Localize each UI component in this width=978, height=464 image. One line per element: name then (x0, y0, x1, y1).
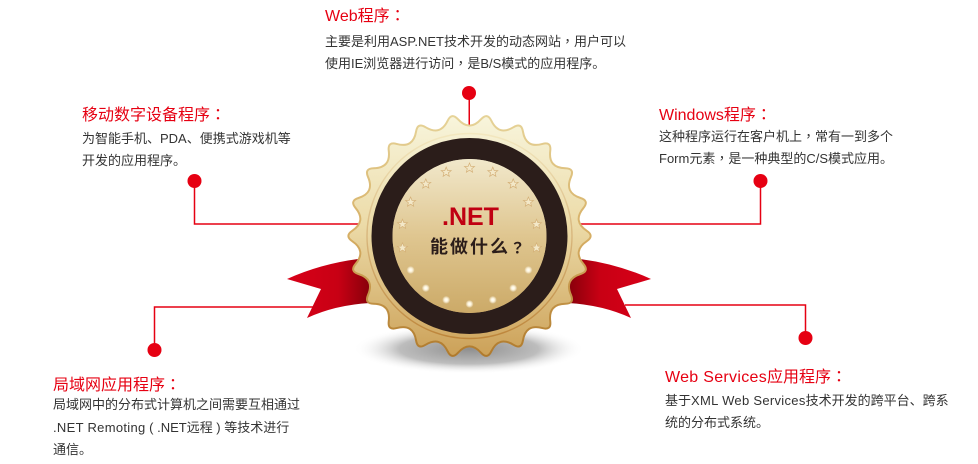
connector: lower left (148, 307, 320, 357)
medal shadow (353, 324, 585, 374)
body: Web Services: 统的分布式系统。 (665, 415, 769, 430)
inner disc (392, 159, 546, 313)
body: LAN: 局域网中的分布式计算机之间需要互相通过 (53, 397, 300, 412)
connector: right (580, 174, 768, 224)
body: Web Services: 基于XML Web Services技术开发的跨平台、跨系 (665, 393, 949, 408)
text block: Web (325, 2, 626, 72)
dark ring (382, 148, 557, 324)
heading: mobile: 移动数字设备程序： (82, 101, 226, 125)
body: Windows: 这种程序运行在客户机上，常有一到多个 (659, 126, 893, 145)
text block: LAN (53, 371, 300, 457)
medal subtitle: 能做什么？ (430, 237, 527, 258)
heading: Web Services: Web Services应用程序： (665, 363, 847, 387)
text block: mobile (82, 101, 291, 168)
medal badge (348, 116, 591, 356)
body: mobile (82, 131, 291, 168)
connector: lower right (625, 305, 812, 345)
heading: Web: Web程序： (325, 2, 406, 26)
text block: Web Services (665, 363, 949, 430)
text block: Windows (659, 101, 893, 167)
body: LAN (53, 397, 300, 457)
ribbon: right (558, 259, 651, 318)
connector: left (188, 174, 360, 224)
body: Web: 主要是利用ASP.NET技术开发的动态网站，用户可以 (325, 31, 626, 50)
heading: LAN: 局域网应用程序： (53, 371, 181, 395)
body: mobile: 为智能手机、PDA、便携式游戏机等 (82, 131, 291, 146)
body: Web Services (665, 393, 949, 430)
stars: lower arc glowing (407, 266, 532, 308)
connector: top (462, 86, 476, 127)
heading: Windows: Windows程序： (659, 101, 772, 125)
ribbon: left (287, 259, 380, 318)
medal title: .NET: .NET (442, 203, 499, 231)
body: LAN: .NET Remoting ( .NET远程 ) 等技术进行 (53, 420, 289, 435)
body: Windows: Form元素，是一种典型的C/S模式应用。 (659, 148, 893, 167)
body: Windows (659, 126, 893, 167)
scalloped rim (348, 116, 591, 356)
body: Web (325, 31, 626, 72)
body: LAN: 通信。 (53, 442, 92, 457)
body: Web: 使用IE浏览器进行访问，是B/S模式的应用程序。 (325, 53, 605, 72)
body: mobile: 开发的应用程序。 (82, 153, 186, 168)
stars: upper arc (398, 163, 542, 252)
